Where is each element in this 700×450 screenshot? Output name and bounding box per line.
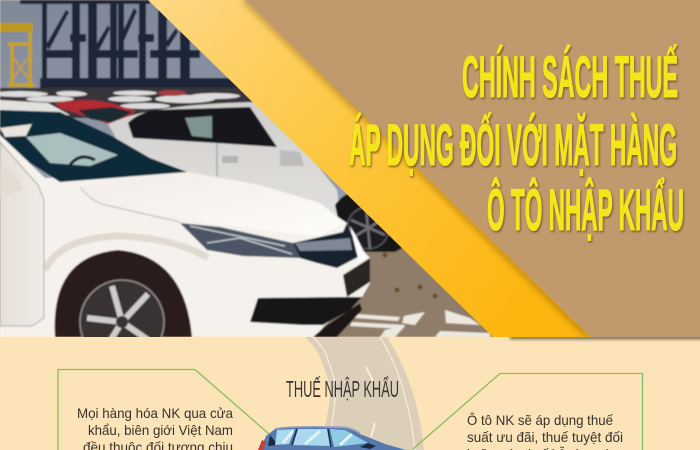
- section heading: THUẾ NHẬP KHẨU: [286, 375, 399, 402]
- left callout text: Mọi hàng hóa NK qua cửa: [77, 405, 233, 421]
- grille: [293, 223, 358, 268]
- right callout text: [467, 412, 623, 450]
- red car: [55, 100, 136, 126]
- photo: imported cars at port: [0, 0, 493, 337]
- title: [349, 45, 684, 243]
- bumper intake: [250, 297, 362, 325]
- shadow under tan panel: [510, 336, 700, 339]
- left callout text: khẩu, biên giới Việt Nam: [88, 422, 233, 438]
- windshield: [0, 110, 187, 182]
- tan title panel: [245, 0, 700, 337]
- headlight: [180, 223, 300, 258]
- yellow crane: [8, 30, 34, 88]
- icon: blue car: [258, 427, 406, 450]
- fender shading: [45, 236, 208, 270]
- number plate: [343, 258, 370, 297]
- yellow diagonal band: [148, 0, 591, 337]
- wheel arch and tyre: [55, 250, 192, 337]
- roof of main car: [0, 100, 70, 115]
- rear tyre: [334, 194, 402, 253]
- second white car: [108, 102, 342, 225]
- right callout text: Ô tô NK sẽ áp dụng thuế: [467, 412, 613, 428]
- left callout outline: [58, 370, 269, 450]
- hood: [254, 190, 343, 236]
- band shadow cast by tan panel: [240, 0, 596, 337]
- right callout outline: [413, 374, 642, 450]
- main car body: [0, 135, 370, 337]
- left callout text: [77, 405, 233, 450]
- right callout text: suất ưu đãi, thuế tuyệt đối: [467, 429, 623, 445]
- side door: [0, 142, 44, 326]
- lower lip shadow: [313, 303, 362, 337]
- road illustration: [305, 337, 424, 450]
- ground: [321, 248, 493, 337]
